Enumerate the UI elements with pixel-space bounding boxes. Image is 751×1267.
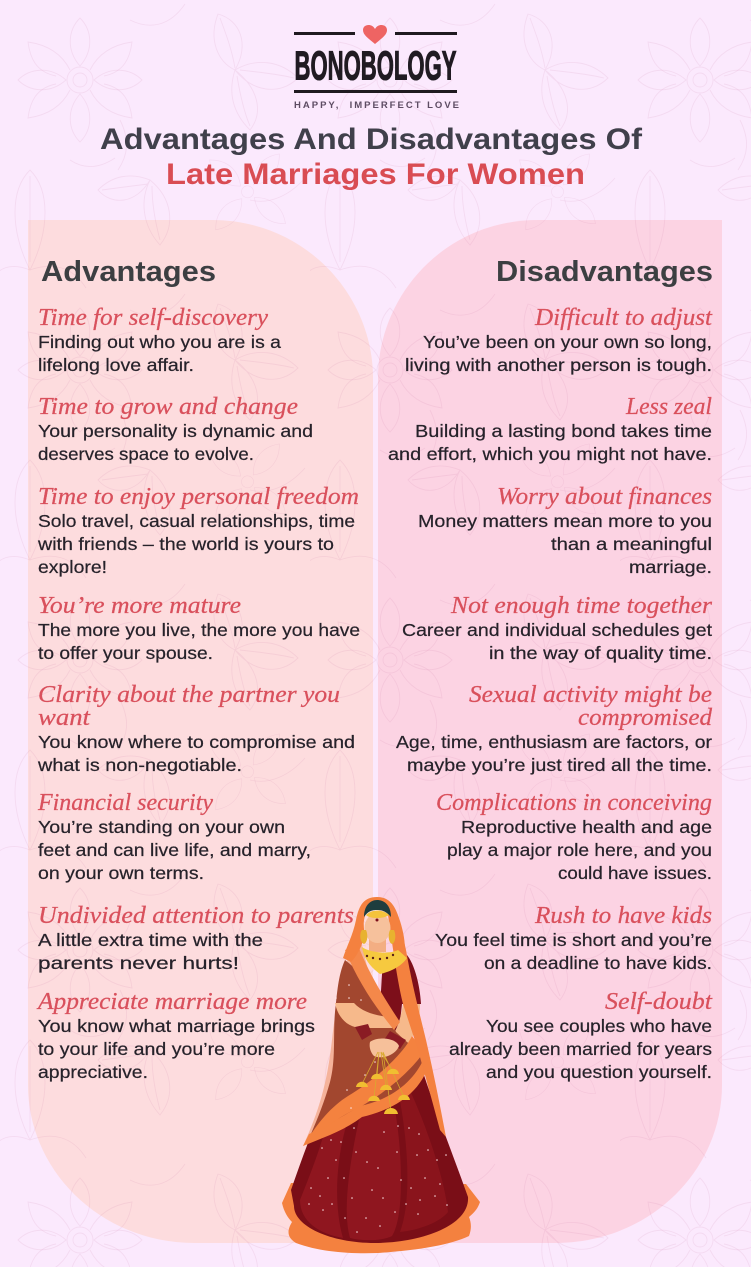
advantage: attention to parents xyxy=(38,903,354,973)
advantage: grow and change: Your personality is dynamic and xyxy=(38,421,313,441)
disadvantage: difficult to adjust: Difficult to adjust xyxy=(534,305,713,331)
heading: advantages: Advantages xyxy=(41,256,216,288)
advantage: appreciate marriage: appreciative. xyxy=(38,1062,148,1082)
advantage: personal freedom: Time to enjoy personal freedom xyxy=(38,484,359,510)
advantage: grow and change: deserves space to evolve. xyxy=(38,444,254,464)
disadvantage: less zeal: and effort, which you might not have. xyxy=(388,444,712,464)
disadvantage: rush to have kids: You feel time is short and you’re xyxy=(435,930,712,950)
logo rule bottom xyxy=(294,90,457,93)
sheer veil back left xyxy=(303,945,375,1146)
advantage: clarity about partner xyxy=(37,682,355,775)
necklace beads xyxy=(367,955,393,959)
advantage: more mature xyxy=(38,593,360,663)
advantage: personal freedom: with friends – the world is yours to xyxy=(37,534,334,554)
veil right stripe xyxy=(386,902,446,1137)
necklace xyxy=(362,947,407,974)
logo tagline: HAPPY, IMPERFECT LOVE xyxy=(294,100,459,111)
bangles xyxy=(355,1024,406,1049)
blouse xyxy=(378,952,421,1040)
disadvantage: worry about finances: than a meaningful xyxy=(551,534,712,554)
advantage: attention to parents: A little extra time with the xyxy=(38,930,263,950)
panel: disadvantages background xyxy=(378,220,722,1243)
arm left and forearm xyxy=(335,1003,396,1028)
tassels xyxy=(356,1052,410,1114)
advantage: appreciate marriage xyxy=(36,989,315,1082)
title line 1: Advantages And Disadvantages Of xyxy=(100,123,643,156)
disadvantage: less zeal: Building a lasting bond takes time xyxy=(415,421,712,441)
advantage: appreciate marriage: to your life and you’re more xyxy=(38,1039,275,1059)
face xyxy=(364,913,390,943)
disadvantage: worry about finances: marriage. xyxy=(629,557,712,577)
title line 2: Late Marriages For Women xyxy=(166,158,585,191)
dupatta sheer fabric xyxy=(310,960,428,1136)
sparkles xyxy=(309,985,460,1232)
advantage: financial security: on your own terms. xyxy=(38,863,204,883)
disadvantage: self-doubt: Self-doubt xyxy=(605,989,713,1015)
forehead jewel xyxy=(366,910,389,918)
disadvantage: difficult to adjust: You’ve been on your own so long, xyxy=(423,332,712,352)
disadvantage: complications in conceiving: play a major role here, and you xyxy=(447,840,712,860)
disadvantage: self-doubt: and you question yourself. xyxy=(486,1062,712,1082)
advantage: financial security: feet and can live life, and marry, xyxy=(38,840,311,860)
disadvantage: sexual activity: Sexual activity might be xyxy=(469,682,712,708)
advantage: clarity about partner: Clarity about the partner you xyxy=(38,682,340,708)
skirt hem xyxy=(282,1183,480,1253)
advantage: self-discovery: lifelong love affair. xyxy=(38,355,194,375)
disadvantage: rush to have kids: Rush to have kids xyxy=(534,903,712,929)
disadvantage: not enough time: in the way of quality time. xyxy=(489,643,712,663)
disadvantage: worry about finances xyxy=(418,484,712,577)
advantage: appreciate marriage: You know what marriage brings xyxy=(38,1016,315,1036)
advantage: grow and change: Time to grow and change xyxy=(38,394,298,420)
disadvantage: sexual activity xyxy=(396,682,713,775)
disadvantage: worry about finances: Money matters mean more to you xyxy=(418,511,712,531)
disadvantage: worry about finances: Worry about finances xyxy=(497,484,712,510)
heading: disadvantages: Disadvantages xyxy=(496,256,713,288)
arm right xyxy=(392,1004,420,1044)
advantage: financial security: You’re standing on your own xyxy=(38,817,285,837)
disadvantage: not enough time: Career and individual schedules get xyxy=(402,620,712,640)
advantage: personal freedom xyxy=(37,484,359,577)
disadvantage: difficult to adjust xyxy=(405,305,713,375)
title xyxy=(100,123,643,191)
advantage: more mature: You’re more mature xyxy=(38,593,241,619)
advantage: financial security xyxy=(37,790,311,883)
dupatta lower border xyxy=(303,1058,430,1146)
logo rule top right xyxy=(395,32,457,35)
panel: advantages background xyxy=(28,220,373,1243)
bindi xyxy=(376,918,378,922)
advantage: personal freedom: explore! xyxy=(38,557,107,577)
disadvantage: rush to have kids xyxy=(435,903,712,973)
advantage: clarity about partner: what is non-negotiable. xyxy=(37,755,242,775)
logo wordmark: BONOBOLOGY xyxy=(294,42,456,88)
disadvantage: complications in conceiving xyxy=(436,790,712,883)
disadvantage: sexual activity: Age, time, enthusiasm are factors, or xyxy=(396,732,712,752)
disadvantage: self-doubt xyxy=(449,989,713,1082)
advantages list xyxy=(36,305,360,1082)
advantage: self-discovery: Time for self-discovery xyxy=(38,305,268,331)
advantage: self-discovery xyxy=(38,305,281,375)
disadvantage: less zeal: Less zeal xyxy=(625,394,712,420)
veil around head xyxy=(343,897,405,962)
advantage: attention to parents: Undivided attention to parents xyxy=(38,903,354,929)
neck xyxy=(369,938,386,952)
advantage: more mature: The more you live, the more you have xyxy=(38,620,360,640)
advantage: financial security: Financial security xyxy=(37,790,213,816)
disadvantage: sexual activity: compromised xyxy=(578,705,713,731)
disadvantage: difficult to adjust: living with another person is tough. xyxy=(405,355,712,375)
disadvantage: not enough time xyxy=(402,593,713,663)
advantage: grow and change xyxy=(38,394,313,464)
earrings xyxy=(360,930,395,944)
advantage: attention to parents: parents never hurts! xyxy=(38,953,239,973)
disadvantage: not enough time: Not enough time together xyxy=(450,593,713,619)
advantage: clarity about partner: want xyxy=(38,705,91,731)
disadvantage: complications in conceiving: Complications in conceiving xyxy=(436,790,712,816)
advantage: clarity about partner: You know where to compromise and xyxy=(38,732,355,752)
advantage: appreciate marriage: Appreciate marriage more xyxy=(36,989,307,1015)
disadvantages list xyxy=(388,305,713,1082)
disadvantage: self-doubt: already been married for years xyxy=(449,1039,712,1059)
disadvantage: complications in conceiving: could have issues. xyxy=(558,863,712,883)
disadvantage: rush to have kids: on a deadline to have kids. xyxy=(484,953,712,973)
advantage: self-discovery: Finding out who you are is a xyxy=(38,332,281,352)
logo rule top left xyxy=(294,32,355,35)
hands xyxy=(370,1039,399,1057)
disadvantage: less zeal xyxy=(388,394,712,464)
logo: Bonobology xyxy=(294,25,459,111)
hair xyxy=(364,900,391,917)
illustration: bride in red lehenga xyxy=(282,897,480,1253)
dupatta diagonal border xyxy=(306,1036,424,1142)
disadvantage: sexual activity: maybe you’re just tired all the time. xyxy=(407,755,712,775)
skirt folds xyxy=(300,1080,448,1240)
dupatta border over chest xyxy=(345,945,400,1030)
icon: heart xyxy=(363,25,387,44)
advantage: personal freedom: Solo travel, casual relationships, time xyxy=(38,511,355,531)
advantage: more mature: to offer your spouse. xyxy=(38,643,213,663)
disadvantage: complications in conceiving: Reproductive health and age xyxy=(461,817,712,837)
disadvantage: self-doubt: You see couples who have xyxy=(486,1016,712,1036)
skirt xyxy=(291,1063,468,1243)
